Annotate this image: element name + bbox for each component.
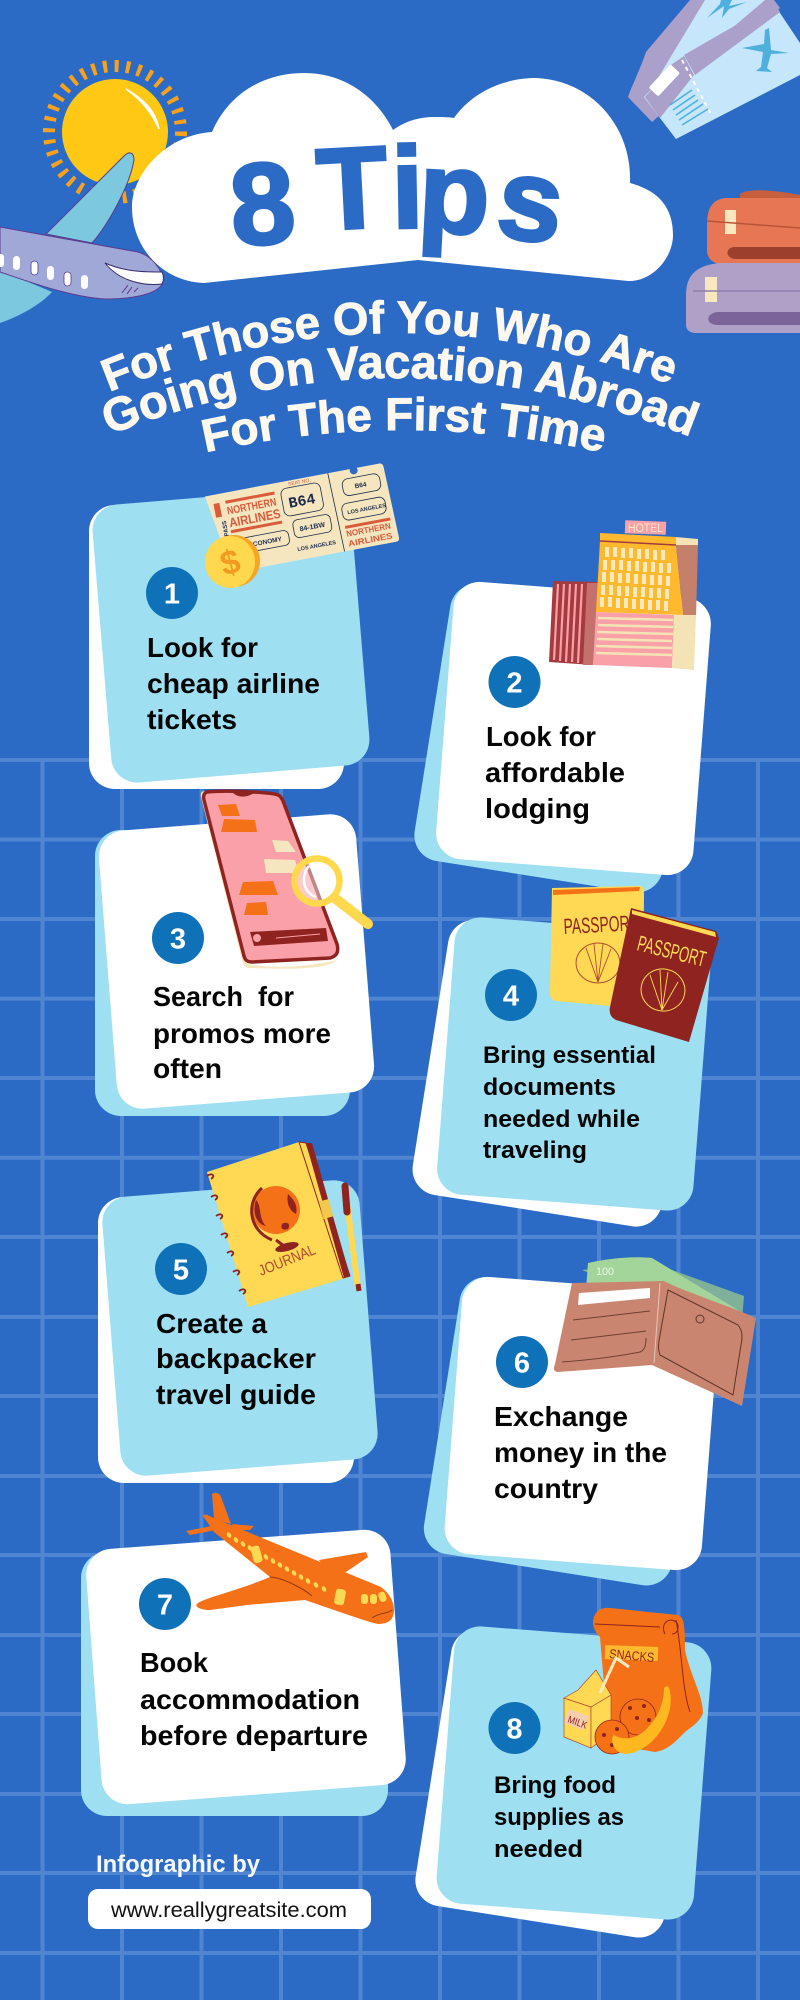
tip 4 text xyxy=(483,1042,656,1164)
footer credit: Infographic by xyxy=(96,1851,261,1878)
tip 6 text xyxy=(494,1401,667,1504)
panel: tip 1 xyxy=(89,461,400,789)
badge 2 xyxy=(488,656,540,708)
tip 2 text: Look for xyxy=(486,721,596,752)
tip 1 text xyxy=(147,632,320,735)
tip 8 text xyxy=(494,1772,624,1863)
tip 2 text xyxy=(485,721,625,824)
icon: coin: $ xyxy=(216,542,244,584)
tip 6 text: money in the xyxy=(494,1437,667,1468)
badge 2: 2 xyxy=(506,668,523,700)
tip 1 text: tickets xyxy=(147,704,237,735)
badge 7 xyxy=(139,1578,191,1630)
subtitle: For Those Of You Who Are xyxy=(100,300,675,392)
icon: snacks: SNACKS xyxy=(609,1646,655,1665)
tip 4 text: traveling xyxy=(483,1137,587,1164)
icon: boarding pass: B64 xyxy=(287,491,317,513)
badge 4 xyxy=(485,969,537,1021)
icon: plane tickets xyxy=(628,0,800,139)
icon: orange airplane xyxy=(186,1493,394,1624)
icon: coin xyxy=(205,535,260,588)
badge 8 xyxy=(488,1702,540,1754)
tip 4 text: needed while xyxy=(483,1106,640,1133)
panel: tip 3 xyxy=(95,791,376,1116)
icon: sun xyxy=(49,66,181,198)
icon: passports: PASSPOR xyxy=(563,911,630,939)
icon: journal with pen: JOURNAL xyxy=(256,1241,318,1280)
tip 5 text: travel guide xyxy=(156,1379,316,1410)
icon: boarding pass: ECONOMY xyxy=(248,536,283,549)
tip 4 text: documents xyxy=(483,1074,616,1101)
icon: hotel: HOTEL xyxy=(628,523,664,535)
tip 6 text: country xyxy=(494,1473,598,1504)
badge 6: 6 xyxy=(514,1348,530,1380)
tip 2 text: affordable xyxy=(485,757,625,788)
badge 4: 4 xyxy=(503,980,519,1012)
tip 8 text: Bring food xyxy=(494,1772,616,1799)
tip 8 text: needed xyxy=(494,1836,583,1863)
panel: tip 4 xyxy=(409,886,719,1230)
badge 5: 5 xyxy=(173,1254,189,1286)
badge 5 xyxy=(155,1243,207,1295)
tip 8 text: supplies as xyxy=(494,1804,624,1831)
tip 3 text: Search for xyxy=(153,981,294,1012)
icon: snacks: MILK xyxy=(566,1714,589,1732)
icon: wallet xyxy=(554,1257,756,1406)
panel: tip 8 xyxy=(412,1608,713,1941)
tip 4 text: Bring essential xyxy=(483,1042,656,1069)
panel: tip 2 xyxy=(411,520,713,896)
subtitle: For The First Time xyxy=(201,396,604,452)
tip 7 text: Book xyxy=(140,1647,208,1678)
tip 7 text: before departure xyxy=(140,1720,368,1751)
tip 7 text: accommodation xyxy=(140,1684,360,1715)
tip 1 text: cheap airline xyxy=(147,668,320,699)
footer credit xyxy=(88,1851,371,1929)
icon: boarding pass: B64 xyxy=(354,481,368,490)
badge 8: 8 xyxy=(506,1714,523,1746)
icon: boarding pass: LOS ANGELES xyxy=(297,540,337,553)
tip 6 text: Exchange xyxy=(494,1401,628,1432)
icon: boarding pass: NORTHERN xyxy=(226,496,277,517)
icon: passports xyxy=(550,886,719,1042)
panel: tip 7 xyxy=(81,1493,408,1816)
tip 7 text xyxy=(140,1647,368,1751)
icon: boarding pass: 84-1BW xyxy=(299,522,326,533)
title text: 8 Tips xyxy=(226,121,571,271)
icon: passports: PASSPORT xyxy=(635,931,709,972)
badge 1 xyxy=(146,567,198,619)
title cloud xyxy=(132,73,673,283)
icon: boarding pass: NORTHERN xyxy=(345,521,391,539)
icon: snacks xyxy=(564,1608,703,1754)
tip 5 text: Create a xyxy=(156,1308,267,1339)
badge 1: 1 xyxy=(164,578,180,610)
tip 5 text: backpacker xyxy=(156,1343,316,1374)
icon: boarding pass: SEAT NO. xyxy=(288,478,311,488)
tip 3 text: often xyxy=(153,1053,222,1084)
icon: boarding pass xyxy=(205,461,400,575)
icon: suitcases xyxy=(686,190,800,333)
badge 6 xyxy=(496,1336,548,1388)
icon: airplane top left xyxy=(0,153,164,323)
icon: boarding pass: AIRLINES xyxy=(228,506,282,530)
icon: journal with pen xyxy=(207,1142,359,1307)
icon: wallet: 100 xyxy=(596,1266,614,1278)
tip 3 text xyxy=(153,981,331,1084)
badge 7: 7 xyxy=(157,1590,173,1622)
badge 3: 3 xyxy=(170,924,186,956)
panel: tip 6 xyxy=(420,1257,756,1589)
footer credit: www.reallygreatsite.com xyxy=(110,1899,347,1922)
subtitle: Going On Vacation Abroad xyxy=(103,346,700,436)
icon: phone with magnifier xyxy=(201,791,368,969)
tip 3 text: promos more xyxy=(153,1018,331,1049)
badge 3 xyxy=(152,912,204,964)
icon: boarding pass: DING PASS xyxy=(222,520,234,553)
tip 1 text: Look for xyxy=(147,632,258,663)
panel: tip 5 xyxy=(98,1142,380,1483)
tip 5 text xyxy=(156,1308,316,1410)
icon: boarding pass: AIRLINES xyxy=(347,530,394,549)
icon: hotel xyxy=(549,520,698,670)
icon: boarding pass: LOS ANGELES xyxy=(347,503,387,516)
tip 2 text: lodging xyxy=(485,793,590,824)
